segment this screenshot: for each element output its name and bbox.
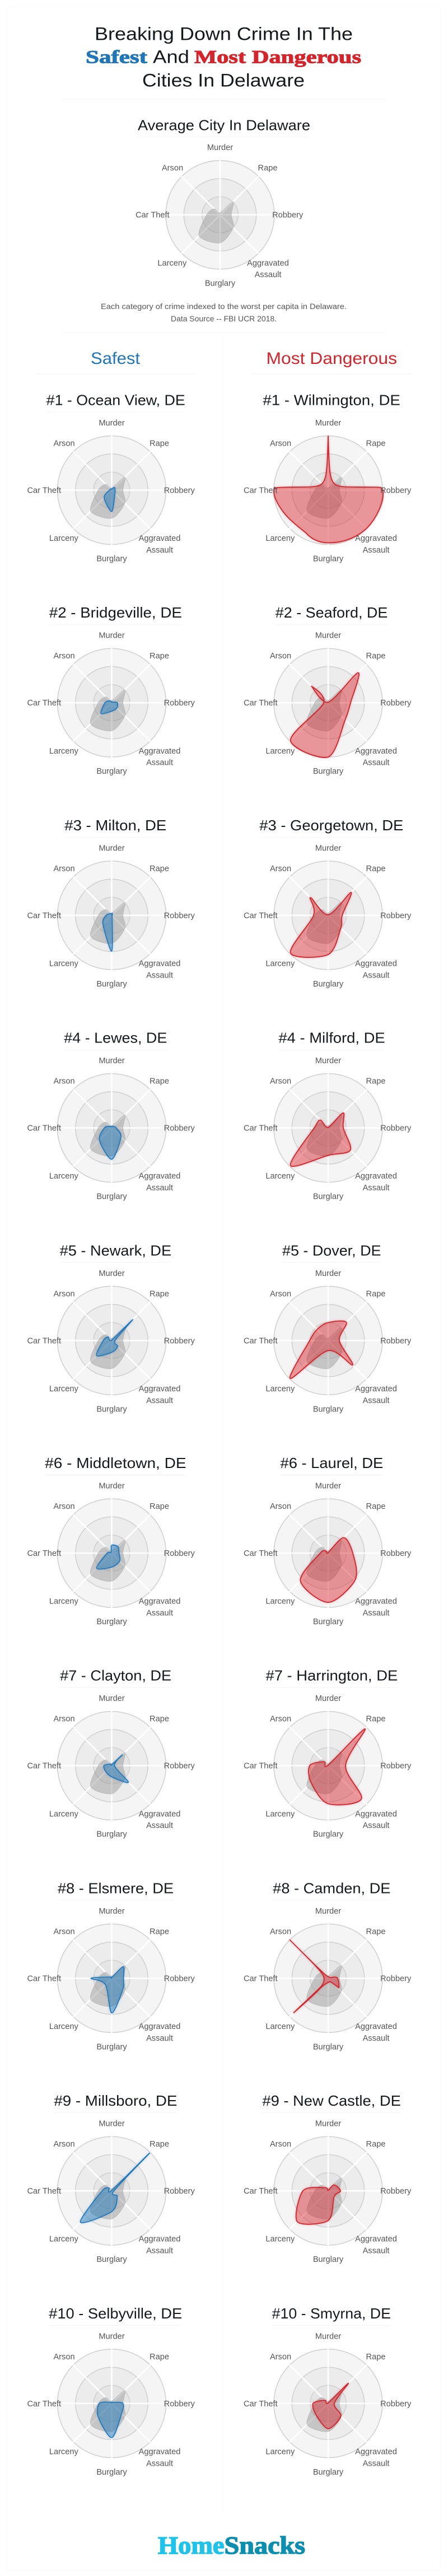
labels: Murder [99, 632, 125, 641]
title: Breaking Down Crime In The [95, 24, 353, 44]
labels: Car Theft [244, 2187, 278, 2196]
labels: Rape [150, 1289, 169, 1298]
labels: Rape [150, 2140, 169, 2149]
labels: Car Theft [244, 2400, 278, 2409]
heading: #10 Selbyville: #10 - Selbyville, DE [49, 2305, 182, 2322]
radar: Laurel [244, 1481, 412, 1626]
shape: Milford [291, 1113, 351, 1166]
labels: Burglary [96, 2255, 127, 2264]
labels: Assault [363, 2459, 389, 2468]
labels: Arson [270, 1077, 291, 1086]
heading: #5 Newark: #5 - Newark, DE [60, 1242, 171, 1259]
axis labels: Robbery [272, 211, 304, 220]
shape: Newark [96, 1320, 133, 1356]
radar chart: average city [136, 143, 304, 288]
heading: #7 Clayton: #7 - Clayton, DE [60, 1667, 171, 1684]
labels: Arson [270, 1715, 291, 1724]
title: And [153, 47, 189, 67]
heading: #6 Middletown: #6 - Middletown, DE [45, 1455, 186, 1471]
labels [27, 1269, 195, 1414]
labels: Burglary [96, 1193, 127, 1201]
labels: Assault [146, 1609, 173, 1618]
column heading: safest: Safest [91, 349, 141, 368]
shape: Smyrna [312, 2383, 348, 2429]
labels: Rape [366, 1502, 385, 1511]
labels: Aggravated [139, 1385, 180, 1394]
labels: Rape [150, 1715, 169, 1724]
shape: Harrington [309, 1729, 365, 1805]
labels: Arson [270, 1289, 291, 1298]
labels: Car Theft [27, 1124, 61, 1133]
labels: Car Theft [27, 2400, 61, 2409]
labels: Arson [270, 864, 291, 873]
labels: Larceny [49, 1385, 78, 1394]
labels: Arson [270, 2353, 291, 2362]
labels: Robbery [164, 1336, 195, 1345]
labels: Murder [315, 844, 341, 853]
labels: Rape [150, 1927, 169, 1936]
labels: Aggravated [355, 960, 397, 969]
labels: Arson [270, 652, 291, 661]
labels: Aggravated [355, 2022, 397, 2031]
shape: Bridgeville [101, 701, 118, 714]
labels: Burglary [313, 1830, 344, 1839]
labels: Arson [270, 2140, 291, 2149]
labels: Assault [363, 546, 389, 555]
labels: Car Theft [27, 699, 61, 708]
labels: Assault [363, 1184, 389, 1193]
labels: Aggravated [139, 2022, 180, 2031]
labels: Burglary [96, 1617, 127, 1626]
labels: Larceny [265, 1597, 295, 1606]
labels: Larceny [49, 2022, 78, 2031]
labels: Robbery [380, 699, 412, 708]
labels: Assault [363, 1609, 389, 1618]
title: Cities In Delaware [142, 70, 305, 90]
labels: Larceny [265, 1172, 295, 1181]
shape: Lewes [99, 1126, 121, 1160]
heading: #9 New Castle: #9 - New Castle, DE [262, 2092, 401, 2109]
labels: Burglary [313, 2468, 344, 2477]
labels: Aggravated [355, 1810, 397, 1818]
radar: Millsboro [27, 2120, 195, 2264]
labels: Rape [366, 1077, 385, 1086]
labels: Larceny [265, 2447, 295, 2456]
labels [27, 632, 195, 776]
labels: Burglary [96, 980, 127, 989]
labels: Larceny [265, 747, 295, 756]
labels: Larceny [49, 2235, 78, 2244]
labels: Robbery [380, 1336, 412, 1345]
labels: Rape [150, 2353, 169, 2362]
radar: Newark [27, 1269, 195, 1414]
labels: Murder [99, 1481, 125, 1490]
labels: Assault [146, 759, 173, 768]
radar: Milton [27, 844, 195, 989]
labels: Arson [53, 1077, 75, 1086]
labels: Aggravated [139, 534, 180, 543]
shape: Ocean View [104, 488, 115, 512]
column heading: most dangerous: Most Dangerous [267, 349, 397, 368]
labels: Burglary [96, 2468, 127, 2477]
labels: Murder [315, 1056, 341, 1065]
axis labels: Aggravated [247, 259, 289, 268]
labels: Aggravated [139, 2235, 180, 2244]
labels [244, 632, 412, 776]
heading: #7 Harrington: #7 - Harrington, DE [265, 1667, 398, 1684]
labels [244, 419, 412, 563]
heading: #1 Ocean View: #1 - Ocean View, DE [46, 392, 185, 409]
labels: Robbery [380, 1762, 412, 1771]
labels: Car Theft [27, 2187, 61, 2196]
labels: Aggravated [355, 2235, 397, 2244]
labels: Robbery [164, 1549, 195, 1558]
labels: Murder [315, 1694, 341, 1703]
shape: Milton [103, 913, 113, 951]
labels: Larceny [265, 960, 295, 969]
labels: Rape [366, 864, 385, 873]
labels: Rape [366, 1715, 385, 1724]
labels: Aggravated [139, 1597, 180, 1606]
labels: Car Theft [244, 699, 278, 708]
labels: Larceny [265, 2022, 295, 2031]
labels: Robbery [164, 2187, 195, 2196]
labels: Burglary [313, 2042, 344, 2051]
labels [27, 844, 195, 989]
labels: Larceny [49, 2447, 78, 2456]
note: data source: Each category of crime indexed to the worst per capita in Delaware. [101, 302, 347, 311]
axis labels: Car Theft [136, 211, 170, 220]
shape: Wilmington [274, 436, 383, 543]
labels: Assault [146, 546, 173, 555]
heading: average city: Average City In Delaware [138, 117, 310, 134]
labels: Car Theft [244, 1124, 278, 1133]
labels: Car Theft [244, 1762, 278, 1771]
labels: Robbery [380, 1124, 412, 1133]
labels: Burglary [96, 1405, 127, 1414]
labels: Rape [366, 2140, 385, 2149]
labels: Murder [315, 1481, 341, 1490]
labels: Arson [270, 439, 291, 448]
radar: Selbyville [27, 2332, 195, 2477]
heading: #1 Wilmington: #1 - Wilmington, DE [263, 392, 400, 409]
labels: Car Theft [27, 911, 61, 920]
labels: Murder [315, 1269, 341, 1278]
labels: Larceny [49, 1597, 78, 1606]
labels: Murder [315, 2332, 341, 2341]
labels: Burglary [313, 2255, 344, 2264]
labels: Aggravated [139, 1172, 180, 1181]
radar: Lewes [27, 1056, 195, 1201]
shape: Laurel [300, 1537, 357, 1602]
labels: Murder [99, 1269, 125, 1278]
labels [27, 2120, 195, 2264]
labels: Murder [315, 1907, 341, 1916]
shape: Millsboro [80, 2153, 150, 2223]
logo: HomeSnacks [158, 2532, 305, 2559]
labels [244, 1056, 412, 1201]
labels: Aggravated [355, 1385, 397, 1394]
shape: Selbyville [97, 2402, 124, 2438]
labels: Larceny [265, 1810, 295, 1818]
labels: Aggravated [355, 534, 397, 543]
labels: Rape [150, 864, 169, 873]
radar: Georgetown [244, 844, 412, 989]
labels: Larceny [265, 534, 295, 543]
labels: Assault [363, 971, 389, 980]
labels: Aggravated [139, 960, 180, 969]
labels: Larceny [49, 1172, 78, 1181]
labels: Arson [53, 439, 75, 448]
logo: HomeSnacks: Snacks [224, 2532, 305, 2559]
labels [244, 1694, 412, 1839]
shape: Elsmere [91, 1967, 124, 2013]
radar: New Castle [244, 2120, 412, 2264]
axis labels [136, 143, 304, 288]
radar: Middletown [27, 1481, 195, 1626]
labels: Murder [99, 2120, 125, 2129]
heading: #10 Smyrna: #10 - Smyrna, DE [272, 2305, 391, 2322]
labels: Assault [363, 2034, 389, 2043]
labels: Robbery [380, 1549, 412, 1558]
labels [27, 1056, 195, 1201]
labels: Aggravated [139, 2447, 180, 2456]
labels: Robbery [380, 486, 412, 495]
labels [27, 1694, 195, 1839]
radar: Harrington [244, 1694, 412, 1839]
labels: Robbery [164, 1762, 195, 1771]
labels: Larceny [49, 960, 78, 969]
labels: Car Theft [27, 1762, 61, 1771]
radar: Wilmington [244, 419, 412, 563]
heading: #4 Milford: #4 - Milford, DE [278, 1030, 385, 1046]
labels: Rape [366, 1289, 385, 1298]
axis labels: Larceny [157, 259, 187, 268]
heading: #3 Georgetown: #3 - Georgetown, DE [259, 817, 403, 834]
labels: Burglary [96, 554, 127, 563]
labels: Aggravated [139, 747, 180, 756]
labels: Aggravated [139, 1810, 180, 1818]
labels: Assault [146, 2247, 173, 2256]
heading: #8 Elsmere: #8 - Elsmere, DE [58, 1880, 174, 1896]
labels: Aggravated [355, 1172, 397, 1181]
axis labels: Assault [255, 270, 281, 279]
radar: Clayton [27, 1694, 195, 1839]
axis labels: Arson [162, 164, 183, 173]
heading: #2 Bridgeville: #2 - Bridgeville, DE [49, 604, 182, 621]
note: data source [101, 302, 347, 323]
axis labels: Burglary [205, 279, 236, 288]
labels [244, 1481, 412, 1626]
labels [27, 1907, 195, 2051]
labels: Assault [363, 1821, 389, 1830]
labels [27, 1481, 195, 1626]
labels: Rape [366, 652, 385, 661]
labels: Larceny [265, 2235, 295, 2244]
labels: Assault [146, 1184, 173, 1193]
labels: Assault [363, 2247, 389, 2256]
axis labels: Murder [207, 143, 233, 152]
radar: Seaford [244, 632, 412, 776]
radar: Milford [244, 1056, 412, 1201]
labels: Murder [99, 2332, 125, 2341]
labels: Assault [146, 2459, 173, 2468]
labels: Burglary [96, 1830, 127, 1839]
labels: Rape [366, 2353, 385, 2362]
logo: HomeSnacks: Home [158, 2532, 224, 2559]
shape: New Castle [296, 2185, 340, 2224]
labels: Rape [366, 439, 385, 448]
title [86, 24, 361, 90]
labels: Assault [146, 1821, 173, 1830]
labels: Burglary [313, 1405, 344, 1414]
labels: Rape [366, 1927, 385, 1936]
labels: Arson [53, 2353, 75, 2362]
title: Safest [86, 47, 147, 67]
labels: Robbery [164, 699, 195, 708]
shape: Middletown [97, 1545, 120, 1569]
labels: Larceny [49, 1810, 78, 1818]
labels: Arson [53, 1289, 75, 1298]
axis labels: Rape [258, 164, 277, 173]
labels: Robbery [164, 1974, 195, 1983]
labels: Murder [99, 1056, 125, 1065]
labels: Car Theft [27, 486, 61, 495]
labels: Arson [270, 1927, 291, 1936]
labels: Assault [146, 2034, 173, 2043]
shape: Dover [290, 1321, 353, 1378]
heading: #8 Camden: #8 - Camden, DE [273, 1880, 390, 1896]
labels: Burglary [96, 767, 127, 776]
labels: Car Theft [244, 1974, 278, 1983]
title: Most Dangerous [194, 47, 361, 67]
labels: Burglary [313, 980, 344, 989]
labels: Arson [53, 1927, 75, 1936]
labels: Murder [315, 2120, 341, 2129]
labels: Burglary [313, 1617, 344, 1626]
radar: Dover [244, 1269, 412, 1414]
labels: Car Theft [27, 1336, 61, 1345]
labels: Burglary [313, 1193, 344, 1201]
labels: Arson [53, 652, 75, 661]
labels: Robbery [164, 911, 195, 920]
labels [27, 419, 195, 563]
labels: Arson [53, 864, 75, 873]
labels: Robbery [164, 486, 195, 495]
labels: Car Theft [27, 1974, 61, 1983]
labels: Murder [99, 844, 125, 853]
labels: Rape [150, 1502, 169, 1511]
heading: #6 Laurel: #6 - Laurel, DE [280, 1455, 383, 1471]
heading: #5 Dover: #5 - Dover, DE [282, 1242, 381, 1259]
labels: Murder [315, 419, 341, 428]
labels: Arson [53, 1502, 75, 1511]
labels: Robbery [380, 1974, 412, 1983]
shape: Seaford [291, 672, 359, 758]
labels: Car Theft [244, 911, 278, 920]
radar: Ocean View [27, 419, 195, 563]
labels: Larceny [49, 747, 78, 756]
labels: Burglary [313, 554, 344, 563]
shape: Georgetown [291, 892, 352, 957]
radar: Smyrna [244, 2332, 412, 2477]
labels: Murder [99, 1694, 125, 1703]
labels: Aggravated [355, 1597, 397, 1606]
labels: Burglary [313, 767, 344, 776]
labels: Robbery [380, 911, 412, 920]
radar: Elsmere [27, 1907, 195, 2051]
labels [27, 2332, 195, 2477]
labels: Car Theft [244, 1336, 278, 1345]
labels: Murder [315, 632, 341, 641]
labels [244, 2332, 412, 2477]
labels [244, 2120, 412, 2264]
labels: Rape [150, 652, 169, 661]
heading: #4 Lewes: #4 - Lewes, DE [64, 1030, 167, 1046]
labels: Burglary [96, 2042, 127, 2051]
labels [244, 844, 412, 989]
labels: Larceny [265, 1385, 295, 1394]
labels [244, 1907, 412, 2051]
labels: Rape [150, 439, 169, 448]
labels: Larceny [49, 534, 78, 543]
heading: #2 Seaford: #2 - Seaford, DE [276, 604, 388, 621]
note: data source: Data Source -- FBI UCR 2018. [171, 314, 277, 323]
heading: #9 Millsboro: #9 - Millsboro, DE [54, 2092, 177, 2109]
labels [244, 1269, 412, 1414]
labels: Murder [99, 419, 125, 428]
labels: Car Theft [244, 1549, 278, 1558]
labels: Arson [270, 1502, 291, 1511]
radar: Bridgeville [27, 632, 195, 776]
labels: Car Theft [244, 486, 278, 495]
labels: Robbery [380, 2187, 412, 2196]
shape: Camden [290, 1940, 339, 2013]
labels: Arson [53, 2140, 75, 2149]
labels: Murder [99, 1907, 125, 1916]
labels: Assault [363, 759, 389, 768]
labels: Assault [146, 971, 173, 980]
labels: Assault [146, 1396, 173, 1405]
radar: Camden [244, 1907, 412, 2051]
labels: Robbery [164, 2400, 195, 2409]
labels: Arson [53, 1715, 75, 1724]
labels: Car Theft [27, 1549, 61, 1558]
labels: Assault [363, 1396, 389, 1405]
labels: Robbery [380, 2400, 412, 2409]
labels: Robbery [164, 1124, 195, 1133]
heading: #3 Milton: #3 - Milton, DE [64, 817, 166, 834]
shape: Clayton [104, 1755, 128, 1783]
labels: Aggravated [355, 2447, 397, 2456]
labels: Rape [150, 1077, 169, 1086]
labels: Aggravated [355, 747, 397, 756]
